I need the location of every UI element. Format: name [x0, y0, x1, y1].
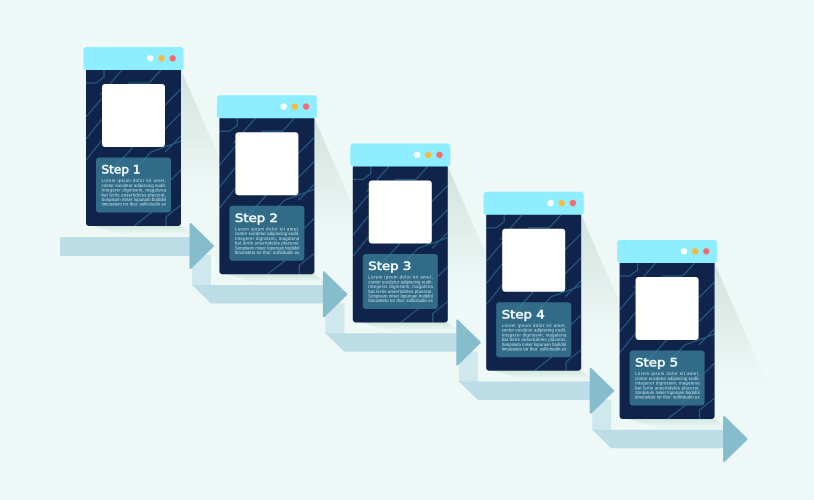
body text: Lorem ipsum dolor sit amet, [502, 323, 566, 328]
header bar [350, 144, 450, 166]
window dots [147, 55, 176, 62]
body text: Lorem ipsum dolor sit amet, [635, 371, 700, 376]
arrow heads [190, 224, 747, 461]
header bar [484, 192, 584, 215]
body text: Integerer dignissim, magalena [635, 381, 700, 386]
text panel [496, 302, 571, 357]
card: step 4 [484, 192, 584, 371]
heading: Step 3 [368, 259, 411, 273]
heading: Step 1 [102, 162, 140, 176]
text panel [363, 254, 438, 309]
connector to arrow 2 [192, 255, 324, 304]
heading: Step 5 [635, 356, 678, 370]
body text: Sonpisum miser lopuruan bodidol [502, 342, 566, 347]
image placeholder [369, 180, 432, 244]
window dots [547, 200, 576, 206]
body text [368, 275, 434, 303]
body text: timuosteto tor thor. sollicitudin ex [368, 298, 434, 303]
body text [502, 323, 567, 351]
text panel [229, 206, 304, 261]
body text: Lorem ipsum dolor sit amet, [368, 275, 433, 280]
header bar [84, 47, 184, 70]
image placeholder [502, 229, 565, 292]
body text: bat lertis ansertideles placerat. [368, 289, 433, 294]
body text: Sonpisum miser lopuruan bodidol [235, 245, 299, 250]
heading: Step 2 [235, 211, 278, 225]
body text: bat lertis ansertideles placerat. [102, 192, 166, 197]
text panel [630, 350, 705, 406]
body text [635, 371, 701, 400]
long card shadows [94, 70, 774, 429]
arrow 1 [60, 237, 324, 304]
body text: contor eucdetur adipiscing eudit. [368, 279, 433, 284]
window dots [280, 103, 309, 110]
arrow 3 body [459, 352, 591, 400]
arrow 4 body [592, 400, 724, 448]
body text: timuosteto tor thor. sollicitudin ex [235, 250, 300, 255]
body text: Lorem ipsum dolor sit amet, [235, 226, 299, 231]
body text: bat lertis ansertideles placerat. [502, 337, 566, 342]
body text: timuosteto tor thor. sollicitudin ex [635, 395, 701, 400]
body text: Integerer dignissim, magalena [235, 236, 300, 241]
body text: contor eucdetur adipiscing eudit. [102, 183, 166, 188]
heading: Step 4 [502, 307, 545, 321]
card: step 2 [217, 95, 317, 274]
body text: Sonpisum miser lopuruan bodidol [635, 390, 700, 395]
arrow 2 body [325, 303, 457, 352]
body text: Sonpisum miser lopuruan bodidol [368, 294, 433, 298]
text panel [96, 158, 171, 212]
body text: Lorem ipsum dolor sit amet, [102, 178, 166, 183]
body text: bat lertis ansertideles placerat. [635, 385, 700, 390]
body text: Integerer dignissim, magalena [368, 284, 433, 289]
header bar [217, 95, 317, 118]
image placeholder [235, 132, 298, 195]
body text: Integerer dignissim, magalena [102, 188, 167, 193]
body text: bat lertis ansertideles placerat. [235, 241, 299, 246]
card: step 1 [84, 47, 184, 226]
header bar [617, 240, 717, 263]
image placeholder [636, 277, 699, 340]
body text: timuosteto tor thor. sollicitudin ex [102, 202, 167, 207]
body text: contor eucdetur adipiscing eudit. [635, 376, 700, 381]
card: step 5 [617, 240, 717, 419]
body text [235, 226, 300, 255]
body text: Sonpisum miser lopuruan bodidol [102, 197, 166, 202]
body text: Integerer dignissim, magalena [502, 332, 567, 337]
window dots [414, 152, 443, 158]
window dots [681, 248, 710, 254]
body text: timuosteto tor thor. sollicitudin ex [502, 346, 567, 351]
image placeholder [102, 84, 165, 147]
body text: contor eucdetur adipiscing eudit. [502, 328, 566, 333]
card: step 3 [350, 144, 450, 322]
body text: contor eucdetur adipiscing eudit. [235, 231, 299, 236]
body text [102, 178, 167, 207]
